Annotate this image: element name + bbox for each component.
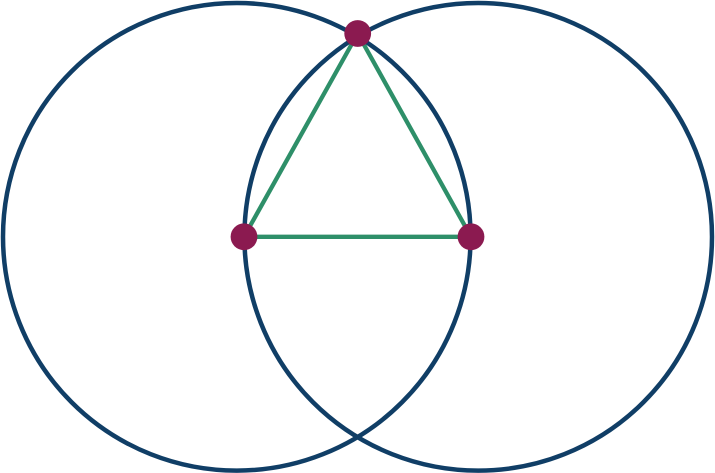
point: left vertex — [231, 223, 257, 250]
circle: left — [3, 3, 471, 471]
point: top vertex — [344, 20, 371, 47]
equilateral triangle — [244, 34, 471, 237]
point: right vertex — [458, 223, 484, 250]
circle: right — [244, 3, 712, 471]
